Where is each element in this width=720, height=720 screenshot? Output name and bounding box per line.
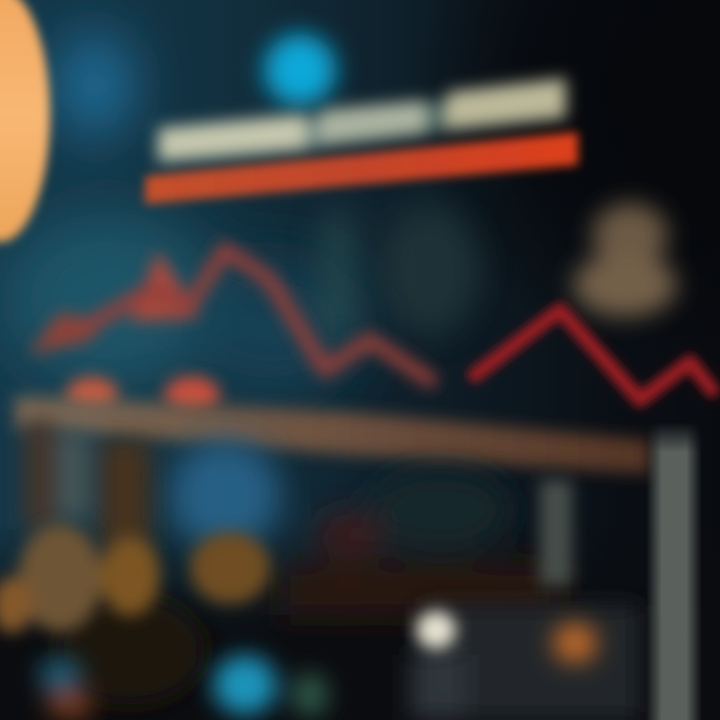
line chart: red zigzag <box>28 250 712 400</box>
background glow <box>0 33 360 400</box>
icon: blue glow spot <box>264 34 336 106</box>
red banner <box>145 132 578 204</box>
device: grey box at bottom right <box>410 605 640 720</box>
icon: white light <box>416 611 456 649</box>
lower shadow <box>0 520 720 720</box>
bottles: brown group at lower left <box>0 420 270 705</box>
icon: orange light <box>553 623 597 663</box>
title: blurred headline <box>158 78 566 162</box>
moon: orange sphere <box>0 0 50 242</box>
icon: beige figure at right <box>573 203 677 317</box>
pillars: grey posts <box>540 422 702 720</box>
red mounds above table <box>66 376 220 414</box>
icon: faint figure in background <box>322 205 480 335</box>
icon: blue orb at bottom <box>38 655 328 718</box>
table: wooden beam <box>15 396 650 474</box>
lower panel: dark area and blue reflection <box>170 440 560 615</box>
